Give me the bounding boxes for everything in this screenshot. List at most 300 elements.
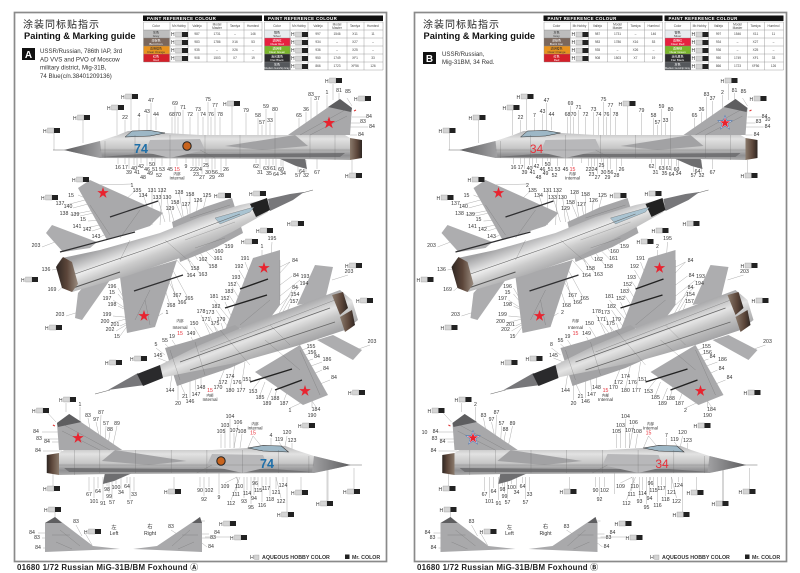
part numbers: scheme B underside view: 154 [686,292,695,298]
part numbers: scheme B underside view: 186 [718,357,727,363]
part numbers: scheme B right side view: 92 [597,497,602,503]
table: paint reference 1 A: 987 [194,32,200,36]
part numbers: scheme B left side view: 73 [591,107,596,113]
part numbers: scheme B tail fins: Right [539,531,552,537]
part numbers: scheme A left side view: 1 [326,90,329,96]
colour chips: scheme B: H [610,194,614,200]
part numbers: scheme A underside view: 15 [207,388,213,394]
part numbers: scheme A left side view: 28 [218,173,224,179]
part numbers: scheme B left side view: 16 [511,165,516,171]
table: paint reference 1 A: 透明橙色 [150,46,162,50]
part numbers: scheme A underside view: 177 [237,388,245,394]
table: paint reference 2 B: – [773,40,775,44]
part numbers: scheme B right side view: 88 [503,427,508,433]
part numbers: scheme B top view: 139 [466,212,475,218]
part numbers: scheme B top view: 164 [582,273,591,279]
colour chips: scheme A: H [214,194,218,200]
part numbers: scheme A left side view: 63 [263,166,269,172]
table: paint reference 2 A: H [291,48,295,54]
part numbers: scheme A top view: 140 [64,204,72,210]
part numbers: scheme A tail fins: Right [144,531,157,537]
part numbers: scheme B left side view: 42 [534,164,539,170]
part numbers: scheme B right side view: 115 [649,488,658,494]
badge: A [22,48,35,61]
part numbers: scheme B underside view: 179 [612,317,621,323]
part numbers: scheme B left side view: 85 [741,89,746,95]
aircraft: scheme B top view [442,180,708,333]
part numbers: scheme B underside view: 170 [609,385,618,391]
part numbers: scheme B underside view: 84 [727,375,732,381]
part numbers: scheme B right side view: 2 [474,402,477,408]
part numbers: scheme A tail fins: 84 [208,544,214,550]
colour chips: scheme B: H [454,398,458,404]
table: paint reference 1 B: 983 [595,40,600,44]
part numbers: scheme B left side view: 25 [599,163,604,169]
part numbers: scheme B top view: 125 [598,193,607,199]
part numbers: scheme A left side view: 83 [308,92,314,98]
table: paint reference 2 A: H [291,40,295,46]
part numbers: scheme A left side view: 70 [175,112,181,118]
colour chips: scheme B: H [502,106,506,112]
colour chips: scheme A: H [230,536,234,542]
part numbers: scheme B left side view: 29 [605,175,610,181]
part numbers: scheme B left side view: 7 [533,113,536,119]
part numbers: scheme B underside view: 203 [763,339,772,345]
part numbers: scheme B left side view: Internal [565,176,580,180]
part numbers: scheme A underside view: 203 [345,269,353,275]
part numbers: scheme B underside view: 84 [688,258,693,264]
text block: scheme A description: AD VVS and PVO of Moscow [40,56,120,64]
legend: scheme B colour systems: Mr. COLOR [752,555,780,561]
part numbers: scheme B underside view: 20 [571,401,576,407]
table: paint reference 2 A: – [372,40,374,44]
part numbers: scheme A top view: 169 [48,287,56,293]
part numbers: scheme A left side view: 49 [147,171,153,177]
part numbers: scheme B underside view: 174 [621,374,630,380]
text block: scheme A description [40,48,122,80]
part numbers: scheme A left side view: 72 [187,112,193,118]
colour chips: scheme A: H [59,398,63,404]
part numbers: scheme B right side view: 94 [647,496,652,502]
part numbers: scheme B right side view: 90 [593,488,598,494]
part numbers: scheme B left side view: 57 [655,120,660,126]
part numbers: scheme A left side view: 64 [273,172,279,178]
table: paint reference 1 B: X7 [634,56,638,60]
part numbers: scheme A left side view: 85 [345,89,351,95]
part numbers: scheme A top view: 159 [225,244,233,250]
part numbers: scheme B top view: 15 [476,217,481,223]
table: paint reference 1 B: Burnt Iron [550,42,563,46]
table: paint reference 1 B: Humbrol [647,24,660,28]
part numbers: scheme B top view [427,183,629,340]
table: paint reference 2 A: 透明绿 [272,46,282,50]
part numbers: scheme A top view: 201 [111,322,119,328]
part numbers: scheme A underside view: 148 [197,385,205,391]
table: paint reference 1 B: 深棕色 [552,38,561,42]
part numbers: scheme B underside view: 176 [628,380,637,386]
part numbers: scheme A left side view: 内部 [174,171,181,176]
part numbers: scheme B underside view: 180 [621,388,630,394]
table: paint reference 1 A: Master [212,26,223,30]
table: paint reference 2 B: X25 [753,48,759,52]
part numbers: scheme A underside view: 147 [192,392,200,398]
table: paint reference 2 B: 934 [716,40,721,44]
part numbers: scheme B left side view: 61 [666,166,671,172]
part numbers: scheme A top view: 136 [42,267,50,273]
colour chips: scheme A: H [107,106,111,112]
table: paint reference 2 A: X27 [352,40,358,44]
part numbers: scheme A top view: 126 [194,198,202,204]
part numbers: scheme B underside view: 181 [605,294,614,300]
part numbers: scheme A underside view: 184 [312,407,320,413]
part numbers: scheme B top view: 132 [553,188,562,194]
part numbers: scheme A left side view: 17 [122,165,128,171]
part numbers: scheme B underside view: 191 [636,256,645,262]
colour chips: scheme A: H [45,326,49,332]
colour chips: scheme B: H [636,240,640,246]
table: paint reference 2 A: 866 [315,64,321,68]
table: paint reference 1 B: Vallejo [593,24,602,28]
colour chips: scheme B: H [468,178,472,184]
part numbers: scheme B underside view: 193 [696,274,705,280]
part numbers: scheme A right side view: 84 [33,429,39,435]
part numbers: scheme A underside view: 19 [169,334,175,340]
part numbers: scheme A underside view: 84 [331,375,337,381]
part numbers: scheme A left side view: 41 [134,170,140,176]
part numbers: scheme A left side view: 46 [144,167,150,173]
aircraft: scheme B tail fins left and right [440,517,598,552]
table: paint reference 1 A: 深棕色 [151,38,161,42]
part numbers: scheme A left side view: 79 [243,108,249,114]
part numbers: scheme A tail fins: 83 [168,524,174,530]
part numbers: scheme A top view: 143 [92,234,100,240]
part numbers: scheme A left side view: 57 [295,173,301,179]
table: paint reference 1 B: – [617,48,619,52]
part numbers: scheme A left side view: 25 [203,163,209,169]
part numbers: scheme B right side view: 33 [527,492,532,498]
part numbers: scheme B left side view: 17 [518,165,523,171]
part numbers: scheme A left side view: 69 [172,101,178,107]
table: paint reference 2 A: 33 [371,56,375,60]
part numbers: scheme A top view: 199 [103,312,111,318]
part numbers: scheme A right side view: 57 [109,500,115,506]
part numbers: scheme A underside view: 176 [233,380,241,386]
part numbers: scheme A left side view: 51 [152,167,158,173]
legend: scheme A colour systems [250,554,380,561]
part numbers: scheme A left side view: 81 [336,88,342,94]
part numbers: scheme A right side view: 118 [266,497,274,503]
part numbers: scheme A underside view: 152 [221,296,229,302]
part numbers: scheme A underside view: 173 [206,310,214,316]
table: paint reference 1 B: PAINT REFERENCE COLOUR [548,16,617,21]
text block: scheme A description: USSR/Russian, 786th IAP, 3rd [40,48,122,55]
legend: scheme A colour systems: Mr. COLOR [352,555,380,561]
badge: B [423,52,436,65]
table: paint reference 2 B: Clear Red [671,42,685,46]
text block: scheme A description: military district, Mig-31B, [40,64,107,72]
part numbers: scheme A left side view: 40 [131,166,137,172]
table: paint reference 2 B: H [692,48,696,54]
aircraft: scheme A right side view [47,414,362,484]
table: paint reference 2 B: PAINT REFERENCE COLOUR [668,16,738,21]
table: paint reference 1 B: Tamiya [630,24,641,28]
part numbers: scheme A left side view: 36 [303,107,309,113]
part numbers: scheme B top view: 161 [609,256,618,262]
part numbers: scheme A top view: 163 [199,272,207,278]
table: paint reference 2 A: Humbrol [367,24,379,28]
part numbers: scheme B right side view: 112 [622,501,631,507]
table: paint reference 2 B: XF1 [753,56,759,60]
part numbers: scheme A left side view: 61 [270,166,276,172]
table: paint reference 1 A: 983 [194,40,200,44]
table: paint reference 1 A: X7 [233,56,237,60]
table: paint reference 2 B: H [692,40,696,46]
part numbers: scheme B top view: 130 [558,195,567,201]
part numbers: scheme A right side view: 112 [227,501,235,507]
part numbers: scheme A underside view: 189 [263,401,271,407]
part numbers: scheme A right side view: 90 [197,488,203,494]
part numbers: scheme B left side view: 64 [695,169,700,175]
part numbers: scheme A tail fins: 84 [35,545,41,551]
colour chips: scheme A: H [256,229,260,235]
part numbers: scheme B top view: 143 [487,234,496,240]
part numbers: scheme A underside view: 150 [190,321,198,327]
table: paint reference 1 A: PAINT REFERENCE COLOUR [147,16,217,21]
part numbers: scheme B underside view: 183 [620,289,629,295]
part numbers: scheme A right side view: 84 [44,439,50,445]
part numbers: scheme B right side view: 84 [431,448,436,454]
table: paint reference 2 B: Color [674,24,682,28]
table: paint reference 1 A: – [234,32,236,36]
part numbers: scheme A left side view: 42 [138,164,144,170]
part numbers: scheme B right side view: 95 [644,505,649,511]
part numbers: scheme A left side view: 27 [199,175,205,181]
part numbers: scheme A underside view: 174 [226,374,234,380]
part numbers: scheme B tail fins: 83 [430,535,435,541]
part numbers: scheme A top view: 167 [173,293,181,299]
table: paint reference 2 A: 1546 [333,32,341,36]
part numbers: scheme A underside view: 190 [308,413,316,419]
part numbers: scheme A underside view: 172 [219,380,227,386]
part numbers: scheme A right side view: 107 [230,428,238,434]
part numbers: scheme A right side view: 57 [103,421,109,427]
part numbers: scheme B left side view: 65 [692,113,697,119]
table: paint reference 1 B: Red [554,58,560,62]
part numbers: scheme B left side view: 63 [659,166,664,172]
part numbers: scheme B left side view: 56 [608,170,613,176]
table: paint reference 1 B: X26 [633,48,639,52]
part numbers: scheme B left side view: 33 [663,118,668,124]
part numbers: scheme B top view: 158 [604,264,613,270]
part numbers: scheme A right side view: 115 [254,488,262,494]
colour chips: scheme A: H [73,116,77,122]
part numbers: scheme A right side view: 64 [124,484,130,490]
aircraft: scheme A right side view: 74 [260,457,274,471]
part numbers: scheme A right side view: 83 [85,413,91,419]
table: paint reference 2 B: X27 [753,40,759,44]
part numbers: scheme B tail fins [425,519,615,551]
part numbers: scheme A top view: 129 [166,206,174,212]
part numbers: scheme B right side view: 99 [502,494,507,500]
colour chips: scheme A: H [164,490,168,496]
table: paint reference 2 A: H [291,56,295,62]
part numbers: scheme A right side view: 122 [277,499,285,505]
part numbers: scheme A right side view: 119 [275,437,283,443]
part numbers: scheme A underside view: 146 [186,399,194,405]
part numbers: scheme A left side view: 58 [255,113,261,119]
part numbers: scheme A left side view: 75 [205,97,211,103]
part numbers: scheme A right side view: 67 [86,492,92,498]
colour chips: scheme B: H [480,530,484,536]
table: paint reference 2 A: 透明红 [272,38,282,42]
colour chips: scheme B: H [686,491,690,497]
colour chips: scheme A: H [241,240,245,246]
part numbers: scheme B left side view: 43 [540,109,545,115]
aircraft: scheme B right side view [442,414,757,484]
table: paint reference 2 A: XF1 [352,56,358,60]
part numbers: scheme A underside view: 84 [292,285,298,291]
part numbers: scheme A underside view: 55 [162,338,168,344]
table: paint reference 2 B: H [692,32,696,38]
part numbers: scheme B underside view: 147 [587,392,596,398]
colour chips: scheme A: H [354,97,358,103]
part numbers: scheme B top view: 199 [498,312,507,318]
part numbers: scheme B underside view: 8 [550,342,553,348]
table: paint reference 2 B: – [737,40,739,44]
table: paint reference 2 B: Clear Green [669,50,686,54]
table: paint reference 2 A: 1723 [333,64,341,68]
part numbers: scheme B right side view: 106 [629,420,638,426]
colour chips: scheme B: H [738,490,742,496]
colour chips: scheme A: H [130,357,134,363]
part numbers: scheme A underside view: 191 [241,256,249,262]
part numbers: scheme B top view: 203 [427,243,436,249]
part numbers: scheme B underside view: 192 [630,264,639,270]
table: paint reference 1 A: X16 [232,40,238,44]
part numbers: scheme B underside view: 194 [695,281,704,287]
part numbers: scheme B top view: 168 [562,303,571,309]
part numbers: scheme B left side view: 75 [601,97,606,103]
part numbers: scheme B underside view: 84 [689,273,694,279]
table: paint reference 1 B: H [572,32,576,38]
part numbers: scheme A top view: 133 [153,195,161,201]
colour chips: scheme B: H [744,391,748,397]
aircraft: scheme A tail fins left and right [45,517,202,552]
part numbers: scheme A right side view: Internal [247,426,263,430]
colour chips: scheme A: H [219,522,223,528]
part numbers: scheme B right side view: 124 [674,483,683,489]
part numbers: scheme A top view: 132 [158,188,166,194]
part numbers: scheme B right side view: 120 [678,430,687,436]
part numbers: scheme A right side view: 106 [234,420,242,426]
table: paint reference 2 A: 126 [370,64,376,68]
part numbers: scheme B underside view: 21 [578,394,583,400]
part numbers: scheme B right side view: 87 [494,410,499,416]
table: paint reference 2 A [264,16,383,70]
part numbers: scheme A top view: 158 [186,192,194,198]
part numbers: scheme A underside view: 194 [300,281,308,287]
part numbers: scheme B left side view: 60 [674,167,679,173]
table: paint reference 2 B: Medium Gunship Gray [665,67,691,70]
part numbers: scheme B left side view: 23 [589,172,594,178]
part numbers: scheme B underside view: 19 [565,334,570,340]
part numbers: scheme A top view: 1 [131,183,134,189]
part numbers: scheme B top view: 15 [505,290,510,296]
part numbers: scheme B underside view: 157 [685,299,694,305]
table: paint reference 1 B: X16 [633,40,639,44]
table: paint reference 2 B: 936 [716,48,721,52]
part numbers: scheme A underside view: 170 [214,385,222,391]
part numbers: scheme A underside view: 内部 [176,318,184,323]
part numbers: scheme A left side view: 45 [167,167,173,173]
table: paint reference 2 B: Silver [674,34,681,38]
part numbers: scheme B left side view: 74 [596,112,601,118]
part numbers: scheme A left side view: 34 [280,171,286,177]
table: paint reference 2 A: Vallejo [313,24,323,28]
part numbers: scheme B right side view: 103 [616,423,625,429]
part numbers: scheme B top view: 128 [570,190,579,196]
part numbers: scheme A underside view: 180 [226,388,234,394]
part numbers: scheme B top view: 196 [503,284,512,290]
part numbers: scheme B tail fins: 84 [431,545,436,551]
table: paint reference 2 A: Color [273,24,282,28]
part numbers: scheme A underside view: 84 [323,366,329,372]
part numbers: scheme B top view: 15 [510,334,515,340]
part numbers: scheme A underside view: 1 [289,408,292,414]
table: paint reference 2 B: 11 [772,32,775,36]
part numbers: scheme A tail fins: 84 [214,530,220,536]
colour chips: scheme A: H [41,196,45,202]
table: paint reference 2 A: X25 [352,48,358,52]
part numbers: scheme A left side view: Internal [169,176,185,180]
table: paint reference 1 B: H [572,56,576,62]
part numbers: scheme B underside view: 内部 [602,392,609,398]
table: paint reference 2 B: Master [733,26,743,30]
table: paint reference 2 B: 1723 [734,64,741,68]
colour chips: scheme A: H [343,490,347,496]
part numbers: scheme A right side view: 15 [250,430,256,436]
part numbers: scheme B right side view: 67 [482,492,487,498]
part numbers: scheme A left side view: 62 [253,164,259,170]
part numbers: scheme B tail fins: 右 [543,522,548,530]
part numbers: scheme B right side view: 122 [672,499,681,505]
colour chips: scheme A: H [32,409,36,415]
table: paint reference 2 A: PAINT REFERENCE COLOUR [268,16,338,21]
colour chips: scheme A: H [72,178,76,184]
table: paint reference 2 A: Model [333,22,342,26]
part numbers: scheme B top view: 2 [561,310,564,316]
part numbers: scheme B top view: 134 [534,193,543,199]
part numbers: scheme A left side view: 26 [223,167,229,173]
table: paint reference 2 B: 1749 [734,56,741,60]
table: paint reference 2 A: – [336,40,338,44]
table: paint reference 1 A: Humbrol [247,24,259,28]
table: paint reference 1 A: 1731 [213,32,221,36]
part numbers: scheme A top view: 15 [109,290,115,296]
part numbers: scheme B left side view: 内部 [569,171,576,176]
part numbers: scheme A underside view: 145 [154,353,162,359]
part numbers: scheme B underside view: 84 [719,366,724,372]
table: paint reference 2 A: XF56 [351,64,359,68]
part numbers: scheme A top view: 131 [148,188,156,194]
part numbers: scheme A right side view: 34 [118,490,124,496]
part numbers: scheme A top view: 202 [106,327,114,333]
part numbers: scheme A left side view: 80 [272,107,278,113]
part numbers: scheme B tail fins: 83 [564,524,569,530]
part numbers: scheme A underside view: 157 [290,299,298,305]
part numbers: scheme B left side view: 51 [548,167,553,173]
table: paint reference 2 A: – [336,48,338,52]
